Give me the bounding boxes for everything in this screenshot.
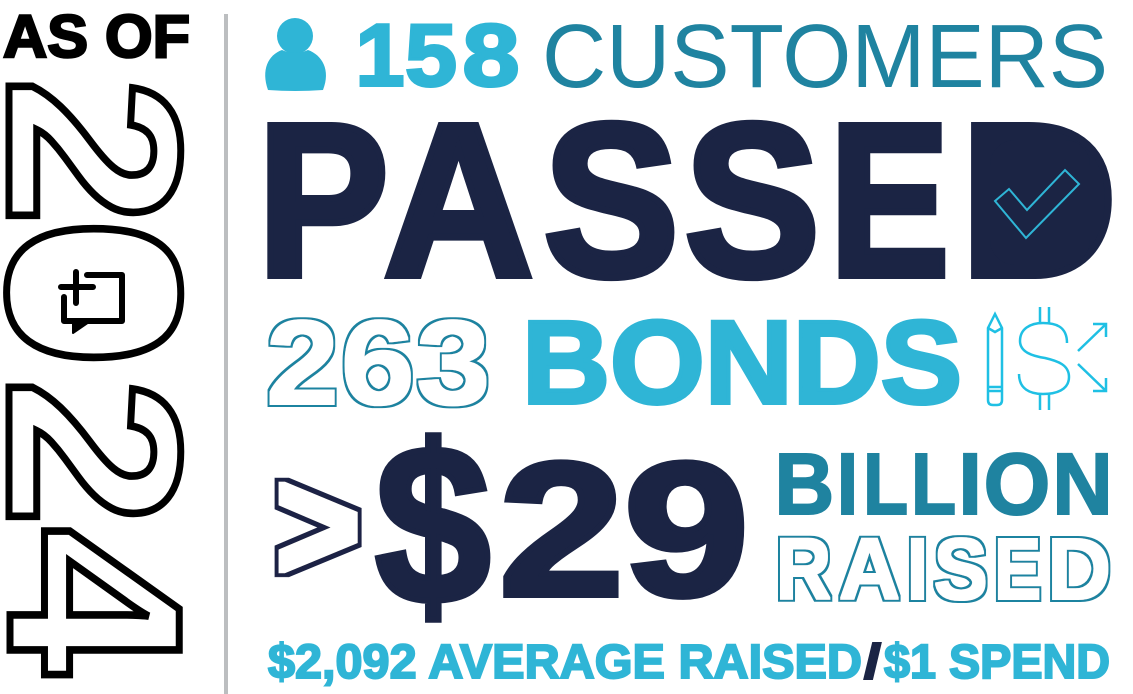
bonds count outline: 2 [266, 296, 339, 430]
average raised per dollar [268, 636, 1110, 689]
passed heading: S [543, 80, 679, 322]
bonds count outline: 3 [416, 296, 490, 430]
billion label: N [1052, 436, 1113, 533]
average raised per dollar: $2,092 AVERAGE RAISED [268, 636, 862, 689]
bonds count outline: 6 [341, 296, 415, 430]
icon: pencil, dollar and arrows [988, 307, 1106, 410]
icon: customer person [265, 18, 326, 91]
passed heading: A [384, 80, 534, 322]
passed heading: E [829, 80, 949, 322]
billion label: I [837, 436, 858, 533]
amount raised: 29 [499, 424, 749, 636]
customers count: 1 [356, 6, 404, 104]
customers count: 5 [405, 6, 457, 104]
billion label: I [958, 436, 982, 533]
billion label: O [984, 436, 1050, 533]
as of label: AS OF [3, 3, 190, 70]
divider [224, 14, 228, 694]
average raised per dollar: / [864, 636, 881, 689]
raised label outline: R [776, 521, 831, 618]
raised label outline: I [907, 521, 928, 618]
average raised per dollar: $1 SPEND [884, 636, 1110, 689]
amount raised: $ [375, 398, 491, 651]
raised label outline: E [994, 521, 1041, 618]
greater-than sign outline: > [276, 436, 360, 614]
year 2024 vertical outline [0, 77, 232, 676]
icon: check mark [995, 170, 1079, 238]
raised label outline: S [934, 521, 988, 618]
customers count: 8 [462, 6, 520, 104]
billion label: L [911, 436, 956, 533]
billion label: L [863, 436, 908, 533]
billion label: B [774, 436, 834, 533]
customers label: CUSTOMERS [542, 7, 1108, 107]
icon: comment bubble with plus [61, 272, 122, 333]
passed heading: D [960, 80, 1117, 322]
raised label outline: A [839, 521, 900, 618]
amount raised [375, 398, 749, 651]
raised label outline: D [1047, 521, 1111, 618]
bonds label: BONDS [522, 297, 962, 429]
passed heading: S [684, 80, 820, 322]
passed heading [257, 80, 1117, 322]
passed heading: P [257, 80, 389, 322]
